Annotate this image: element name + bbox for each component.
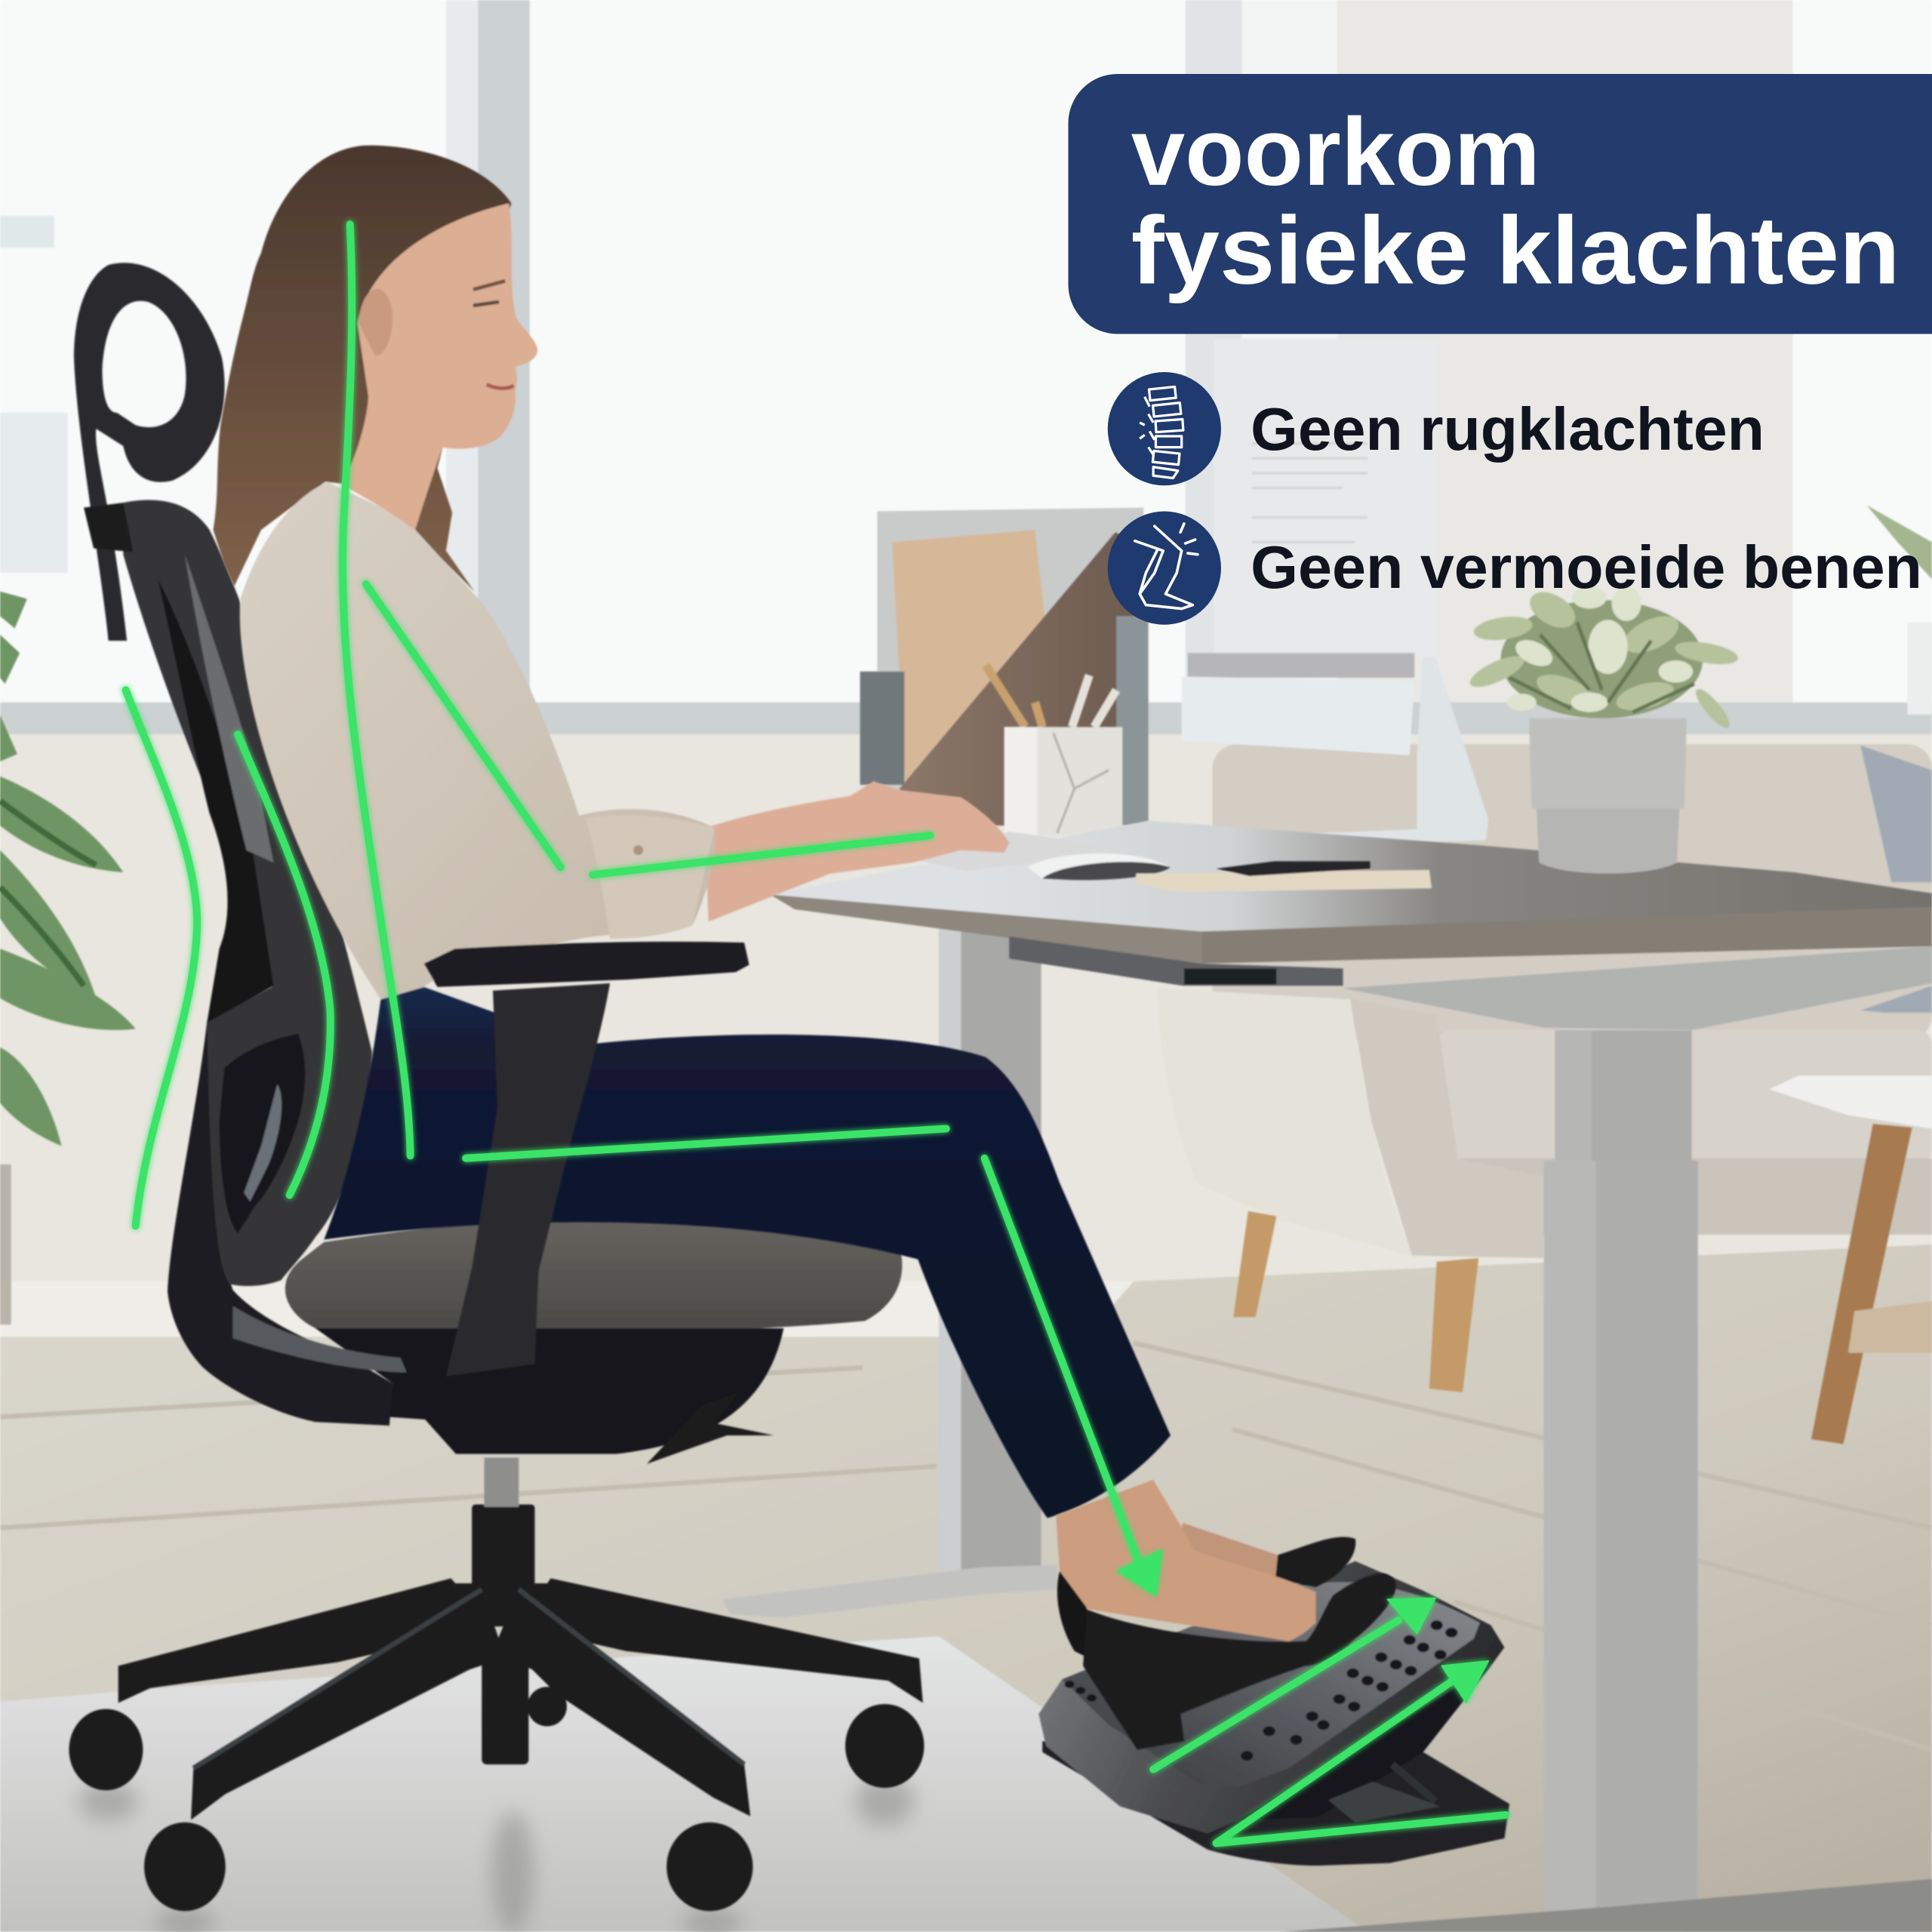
monitor: [1182, 339, 1488, 849]
line: forearm: [592, 835, 931, 875]
front foot skin: [1056, 1480, 1316, 1641]
chair backrest: [123, 500, 372, 1286]
heading: voorkom: [1131, 98, 1540, 205]
line: back support outer: [126, 690, 197, 1226]
potted plant: [1466, 505, 1932, 874]
standing desk back leg: [722, 924, 1057, 1618]
line: spine: [343, 224, 411, 1155]
arrow: footrest tilt: [1216, 1661, 1506, 1843]
pants: [324, 987, 1171, 1518]
heading: [1131, 98, 1900, 304]
chair reflections on mat: [78, 1777, 914, 1932]
chair base: [69, 1457, 924, 1911]
pencil cup: [986, 666, 1122, 835]
text: geen vermoeide benen: Geen vermoeide benen: [1251, 534, 1922, 601]
line: thigh: [466, 1129, 946, 1158]
plant foliage: [1466, 585, 1740, 732]
chair back frame: [168, 1021, 393, 1426]
front shoe: [1083, 1574, 1396, 1749]
banner panel: [1069, 74, 1932, 334]
line: chair lumbar: [238, 734, 331, 1195]
headrest: [74, 263, 225, 641]
desk front leg: [1281, 1030, 1932, 1932]
file holder: [860, 508, 1149, 826]
text: geen rugklachten: Geen rugklachten: [1251, 395, 1764, 463]
sweater: [240, 481, 715, 999]
armrest: [424, 942, 749, 1377]
heading: fysieke klachten: [1131, 197, 1900, 304]
footrest: [1038, 1561, 1509, 1866]
arrow: lower leg: [984, 1158, 1162, 1595]
plant: left: [0, 592, 136, 1324]
back heel: [1057, 1571, 1087, 1657]
office chair: [69, 263, 924, 1911]
forearm and hand: [705, 781, 1009, 921]
back foot: [1171, 1523, 1278, 1595]
seat mechanism: [315, 1328, 783, 1454]
icon: spine: [1108, 372, 1221, 485]
feet and shoes: [1056, 1480, 1396, 1749]
desk: [770, 820, 1932, 1030]
face and neck: [341, 203, 537, 530]
arrow: footrest top: [1153, 1598, 1435, 1769]
woman: [213, 146, 1171, 1518]
items on desk: keyboard, mouse, notebook, pen: [918, 832, 1432, 892]
posture guide lines in green: [126, 224, 1506, 1843]
icon: legs: [1108, 512, 1221, 625]
hair back: [213, 146, 512, 592]
benefit: geen vermoeide benen: [1108, 512, 1922, 625]
seat cushion: [285, 1198, 902, 1334]
sofa and armchair: [1157, 744, 1932, 1444]
benefit: geen rugklachten: [1108, 372, 1764, 485]
line: upper arm: [366, 584, 561, 867]
